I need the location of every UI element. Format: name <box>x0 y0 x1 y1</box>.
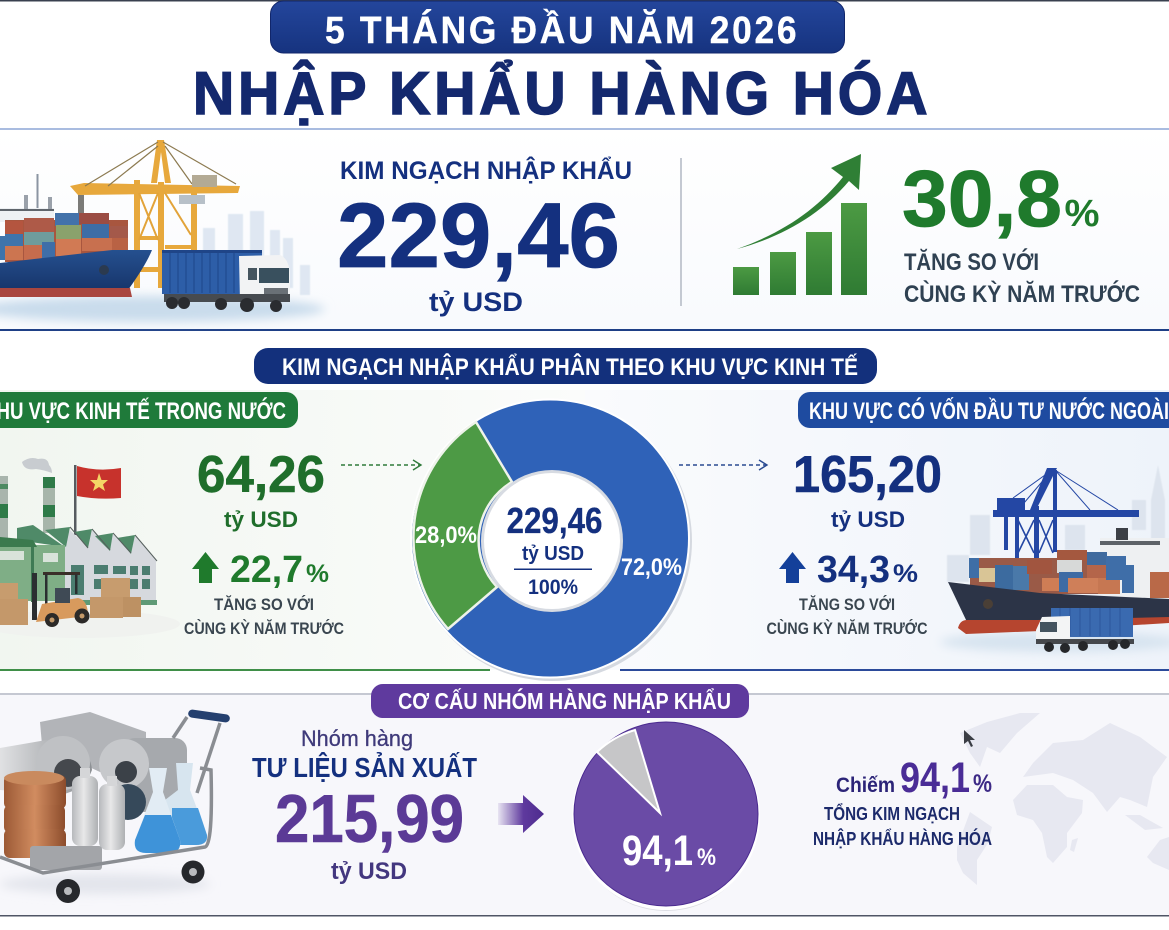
label: total import value: 229,46 <box>337 185 620 287</box>
illustration: ship with blue crane and truck <box>940 465 1169 653</box>
icon: Vietnamese flag <box>77 466 121 499</box>
header: period banner <box>270 1 844 53</box>
growth rate: 30,8 <box>902 154 1062 243</box>
white superstructure <box>1100 528 1169 600</box>
header: period banner: 5 THÁNG ĐẦU NĂM 2026 <box>325 9 797 51</box>
small case <box>30 846 102 870</box>
domestic sector figures: % <box>306 560 329 588</box>
pie chart: 94,1 <box>622 827 693 875</box>
domestic sector figures: CÙNG KỲ NĂM TRƯỚC <box>184 619 344 638</box>
foreign sector figures <box>766 446 942 638</box>
share callout: TỔNG KIM NGẠCH <box>824 803 960 824</box>
label: total import value <box>337 155 632 317</box>
share callout: 94,1 <box>900 754 970 802</box>
cart frame <box>0 717 220 873</box>
foreign sector figures: TĂNG SO VỚI <box>799 595 895 614</box>
growth rate: % <box>1064 193 1100 235</box>
foreign sector figures: CÙNG KỲ NĂM TRƯỚC <box>766 619 928 638</box>
domestic sector figures: 64,26 <box>197 446 325 504</box>
illustration: cart of raw materials <box>0 709 230 903</box>
panel: goods structure <box>0 684 1169 916</box>
sector heading: KIM NGẠCH NHẬP KHẨU PHÂN THEO KHU VỰC KINH TẾ <box>282 353 858 381</box>
donut chart: 28,0% <box>415 522 477 549</box>
share callout <box>813 754 992 849</box>
domestic sector figures: 22,7 <box>230 549 303 591</box>
domestic sector figures: tỷ USD <box>224 507 298 532</box>
steel block <box>40 712 146 772</box>
sector heading <box>254 348 877 384</box>
ship hull <box>948 582 1169 634</box>
goods heading <box>371 684 749 718</box>
share callout: NHẬP KHẨU HÀNG HÓA <box>813 828 992 849</box>
icon: forklift <box>32 572 90 627</box>
donut chart: 229,46 <box>506 500 602 541</box>
donut chart: 100% <box>528 576 578 599</box>
donut chart: 72,0% <box>621 554 682 581</box>
arrow: foreign to donut <box>679 460 767 470</box>
ship <box>0 174 152 297</box>
label: total import value: KIM NGẠCH NHẬP KHẨU <box>340 155 632 185</box>
cardboard boxes <box>0 578 141 625</box>
main title: NHẬP KHẨU HÀNG HÓA <box>193 59 927 127</box>
icon: up arrow blue <box>779 552 806 583</box>
world map background <box>957 713 1169 885</box>
goods group figures: TƯ LIỆU SẢN XUẤT <box>252 751 477 783</box>
icon: mouse cursor <box>964 730 975 747</box>
left steel coil <box>0 736 92 795</box>
right steel coil <box>99 738 187 820</box>
donut chart <box>410 398 692 681</box>
containers <box>969 550 1169 598</box>
domestic sector figures: TĂNG SO VỚI <box>214 595 314 614</box>
panel: total import value <box>0 128 1169 331</box>
goods group figures: 215,99 <box>275 781 464 857</box>
pie chart <box>572 722 760 911</box>
panel: by economic sector <box>0 348 1169 681</box>
wheels <box>56 860 204 903</box>
foreign sector figures: 34,3 <box>817 549 890 591</box>
truck <box>1036 608 1134 653</box>
arrow: to pie chart <box>498 795 544 833</box>
blue crane <box>993 468 1139 568</box>
pie chart: % <box>697 844 716 871</box>
bottles <box>72 768 125 850</box>
growth rate: CÙNG KỲ NĂM TRƯỚC <box>904 280 1140 308</box>
factory building <box>0 525 157 605</box>
copper coils <box>4 771 66 858</box>
illustration: factory with flag and forklift <box>0 458 180 638</box>
goods heading: CƠ CẤU NHÓM HÀNG NHẬP KHẨU <box>398 687 731 714</box>
icon: up arrow green <box>192 552 219 583</box>
growth rate: TĂNG SO VỚI <box>904 248 1039 276</box>
goods group figures: Nhóm hàng <box>301 726 413 751</box>
domestic sector heading <box>0 392 298 428</box>
illustration: port with ship, crane and truck <box>0 140 325 322</box>
share callout: Chiếm <box>836 774 895 797</box>
growth rate <box>902 154 1140 308</box>
arrow: domestic to donut <box>341 460 421 470</box>
crane <box>70 140 240 288</box>
truck <box>162 250 290 312</box>
flasks <box>135 763 207 853</box>
foreign sector figures: tỷ USD <box>831 507 905 532</box>
icon: growth bar chart with arrow <box>733 154 867 295</box>
foreign sector figures: % <box>893 560 918 588</box>
goods group figures <box>252 726 477 885</box>
foreign sector figures: 165,20 <box>793 446 942 504</box>
goods group figures: tỷ USD <box>331 858 407 885</box>
donut chart: tỷ USD <box>522 543 584 565</box>
label: total import value: tỷ USD <box>429 287 523 317</box>
share callout: % <box>973 770 992 798</box>
domestic sector figures <box>184 446 344 638</box>
